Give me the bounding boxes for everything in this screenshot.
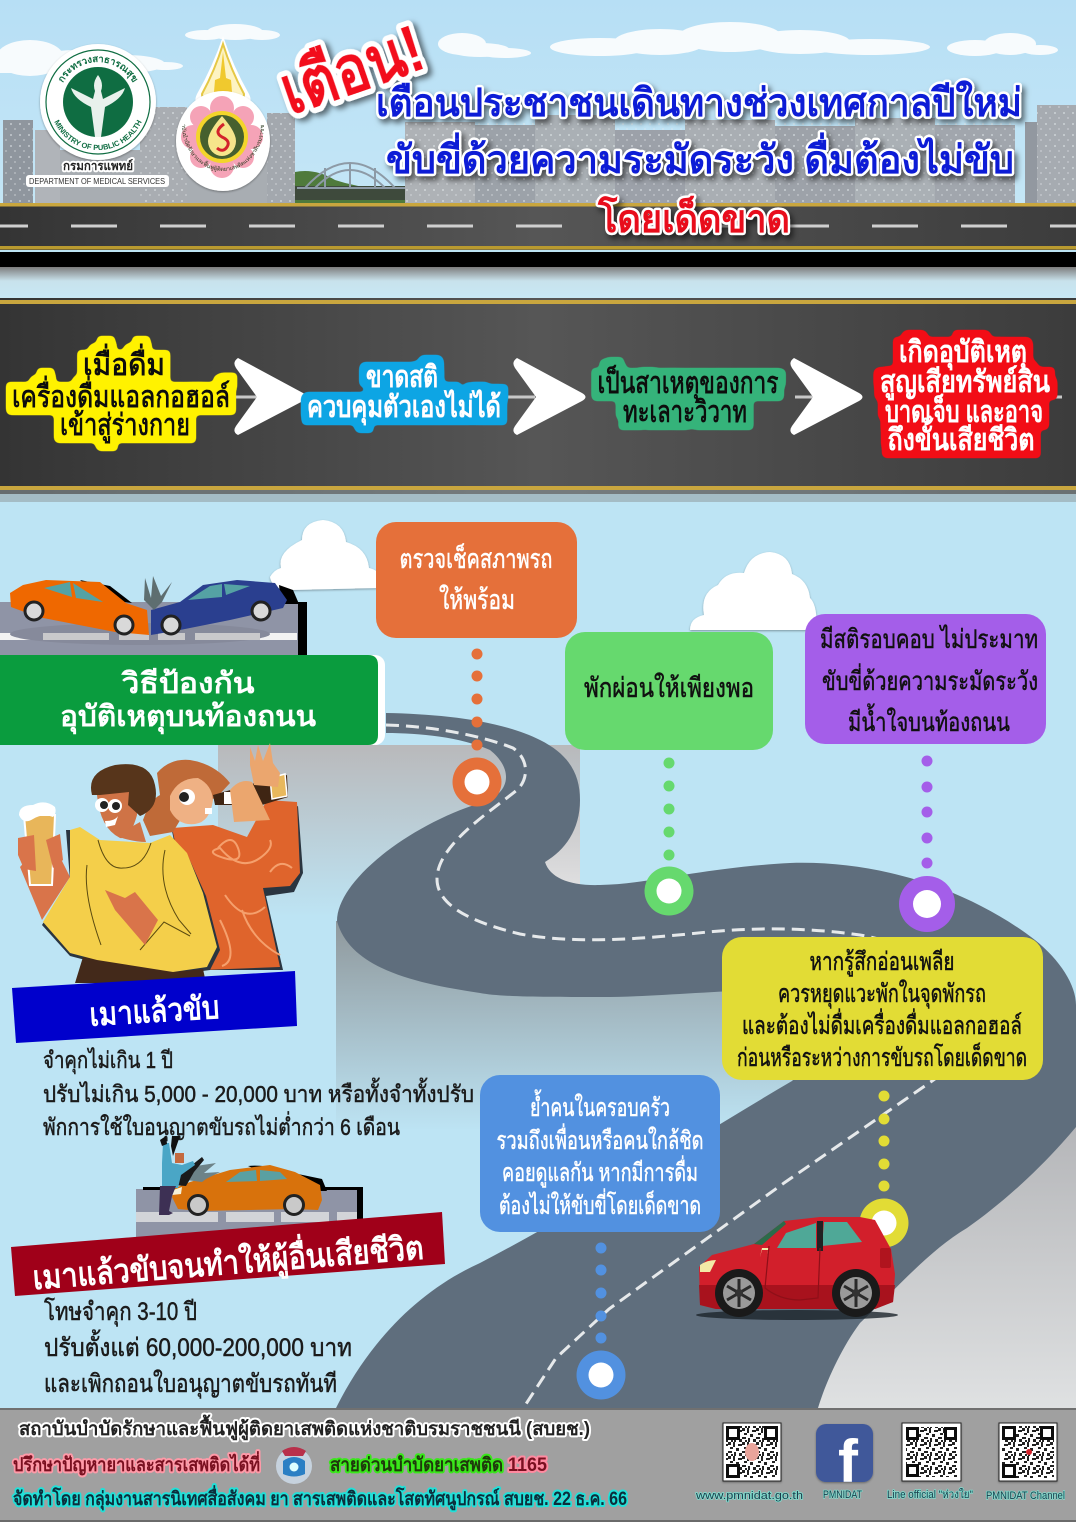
penalties: causing death: โทษจำคุก 3-10 ปี — [44, 1297, 197, 1327]
step 1: when alcohol enters the body: เข้าสู่ร่างกาย — [60, 409, 190, 444]
penalties: drunk driving: พักการใช้ใบอนุญาตขับรถไม่ต่ำกว่า 6 เดือน — [43, 1111, 400, 1141]
arrow 2 — [513, 358, 586, 435]
tip box: remind family and friends: รวมถึงเพื่อนหรือคนใกล้ชิด — [496, 1123, 704, 1155]
tip box: get enough rest: พักผ่อนให้เพียงพอ — [584, 672, 754, 703]
tip dots and marker: rest — [644, 758, 694, 916]
tip box: check car condition — [376, 522, 577, 638]
tip box: be mindful and courteous: มีน้ำใจบนท้องถนน — [848, 703, 1010, 737]
process band road — [0, 298, 1076, 502]
social captions: PMNIDAT — [823, 1489, 862, 1501]
social captions: Line official "ห่วงใย" — [887, 1488, 973, 1501]
penalties: drunk driving: ปรับไม่เกิน 5,000 - 20,000 บาท หรือทั้งจำทั้งปรับ — [43, 1078, 474, 1107]
footer panel — [0, 1408, 1076, 1522]
step 3: cause of quarrels: ทะเลาะวิวาท — [623, 396, 747, 429]
tip box: remind family and friends: ย้ำคนในครอบครัว — [530, 1089, 670, 1122]
tip box: remind family and friends: ต้องไม่ให้ขับขี่โดยเด็ดขาด — [499, 1188, 701, 1220]
step 1: when alcohol enters the body: เมื่อดื่ม — [83, 343, 165, 382]
tip box: check car condition: ตรวจเช็คสภาพรถ — [400, 541, 552, 574]
icon: Facebook — [816, 1424, 873, 1495]
arrow 3 — [790, 358, 862, 435]
QR code: Line official — [902, 1423, 961, 1481]
penalties: drunk driving: จำคุกไม่เกิน 1 ปี — [43, 1047, 173, 1074]
heading: how to prevent road accidents: วิธีป้องกัน — [121, 668, 255, 700]
step 4: accident, loss and death: เกิดอุบัติเหตุ — [899, 336, 1027, 371]
road — [218, 713, 1076, 1408]
illustration: car hits pedestrian — [136, 1136, 363, 1244]
social captions — [695, 1488, 1065, 1502]
banner: drunk driving — [12, 971, 297, 1043]
step 2: loss of self control: ควบคุมตัวเองไม่ได้ — [307, 389, 501, 426]
tip dots and marker: check car — [452, 648, 502, 806]
footer: hotline number: 1165 — [508, 1455, 547, 1476]
tip box: check car condition: ให้พร้อม — [439, 584, 515, 615]
step 2: loss of self control — [307, 361, 501, 426]
illustration: drinking couple — [18, 743, 303, 983]
title: โดยเด็ดขาด — [597, 195, 790, 241]
heading: how to prevent road accidents: อุบัติเหตุบนท้องถนน — [60, 701, 316, 734]
penalties: causing death — [44, 1297, 352, 1399]
footer: produced by: จัดทำโดย กลุ่มงานสารนิเทศสื่อสังคม ยา สารเสพติดและโสตทัศนูปกรณ์ สบยช. 22 ธ.ค. 66 — [13, 1485, 627, 1511]
icon: hotline telephone — [276, 1447, 312, 1484]
warning stamp word: เตือน! — [271, 10, 433, 128]
step 1: when alcohol enters the body — [12, 343, 230, 444]
footer: hotline number: สายด่วนบำบัดยาเสพติด — [330, 1455, 503, 1476]
tip box: remind family and friends: คอยดูแลกัน หากมีการดื่ม — [502, 1155, 698, 1188]
banner: drunk driving: เมาแล้วขับ — [88, 989, 220, 1033]
penalties: causing death: และเพิกถอนใบอนุญาตขับรถทันที — [44, 1369, 337, 1399]
logo: Ministry of Public Health: MINISTRY OF PUBLIC HEALTH — [54, 120, 142, 150]
step 1: when alcohol enters the body: เครื่องดื่มแอลกอฮอล์ — [12, 375, 230, 414]
penalties: drunk driving — [43, 1047, 474, 1141]
logo: Ministry of Public Health: กรมการแพทย์ — [63, 159, 133, 173]
footer: consultation line: ปรึกษาปัญหายาและสารเสพติดได้ที่ — [13, 1451, 260, 1476]
step 4: accident, loss and death — [880, 336, 1050, 457]
logo: Ministry of Public Health — [26, 44, 169, 187]
tip box: remind family and friends — [480, 1075, 720, 1232]
title: ขับขี่ด้วยความระมัดระวัง ดื่มต้องไม่ขับ — [386, 132, 1014, 182]
crash illustration — [0, 576, 307, 655]
tip dots and marker: mindful driving — [899, 756, 955, 932]
tip box: stop and rest when tired — [722, 937, 1043, 1080]
tip box: be mindful and courteous — [805, 614, 1046, 744]
heading: how to prevent road accidents — [0, 655, 385, 745]
header scene: sky, clouds, city and road — [0, 0, 1076, 298]
tip box: stop and rest when tired: หากรู้สึกอ่อนเพลีย — [810, 948, 954, 977]
logo: Ministry of Public Health: กระทรวงสาธารณสุข — [59, 56, 138, 82]
step 2: loss of self control: ขาดสติ — [366, 361, 438, 394]
clouds — [270, 520, 816, 630]
tip dots and marker: take a break — [860, 1090, 908, 1248]
footer: institute name: สถาบันบำบัดรักษาและฟื้นฟูผู้ติดยาเสพติดแห่งชาติบรมราชชนนี (สบยช.) — [19, 1414, 590, 1441]
arrow 1 — [234, 358, 306, 435]
penalties: causing death: ปรับตั้งแต่ 60,000-200,000 บาท — [44, 1329, 352, 1362]
step 3: cause of quarrels: เป็นสาเหตุของการ — [598, 364, 778, 402]
step 4: accident, loss and death: ถึงขั้นเสียชีวิต — [888, 417, 1034, 457]
title: เตือนประชาชนเดินทางช่วงเทศกาลปีใหม่ — [376, 80, 1022, 125]
tip box: stop and rest when tired: ควรหยุดแวะพักในจุดพักรถ — [778, 979, 986, 1009]
social captions: www.pmnidat.go.th — [695, 1490, 803, 1502]
icon: Facebook: f — [838, 1428, 859, 1495]
logo: Princess Mother institute emblem — [175, 39, 271, 193]
tip box: get enough rest — [565, 632, 773, 750]
title — [376, 80, 1022, 241]
tip dots and marker: family reminder — [576, 1242, 626, 1400]
red car — [696, 1217, 898, 1320]
QR code: YouTube channel — [999, 1423, 1057, 1481]
social captions: PMNIDAT Channel — [986, 1490, 1065, 1502]
logo: Ministry of Public Health: DEPARTMENT OF MEDICAL SERVICES — [29, 177, 165, 186]
banner: drunk driving causing death: เมาแล้วขับจนทำให้ผู้อื่นเสียชีวิต — [31, 1224, 425, 1299]
step 3: cause of quarrels — [598, 364, 778, 429]
QR code: website — [723, 1423, 781, 1481]
logo: Princess Mother institute emblem: สถาบันบำบัดรักษาและฟื้นฟูผู้ติดยาเสพติดแห่งชาติบรมราชชนนี — [182, 124, 264, 172]
